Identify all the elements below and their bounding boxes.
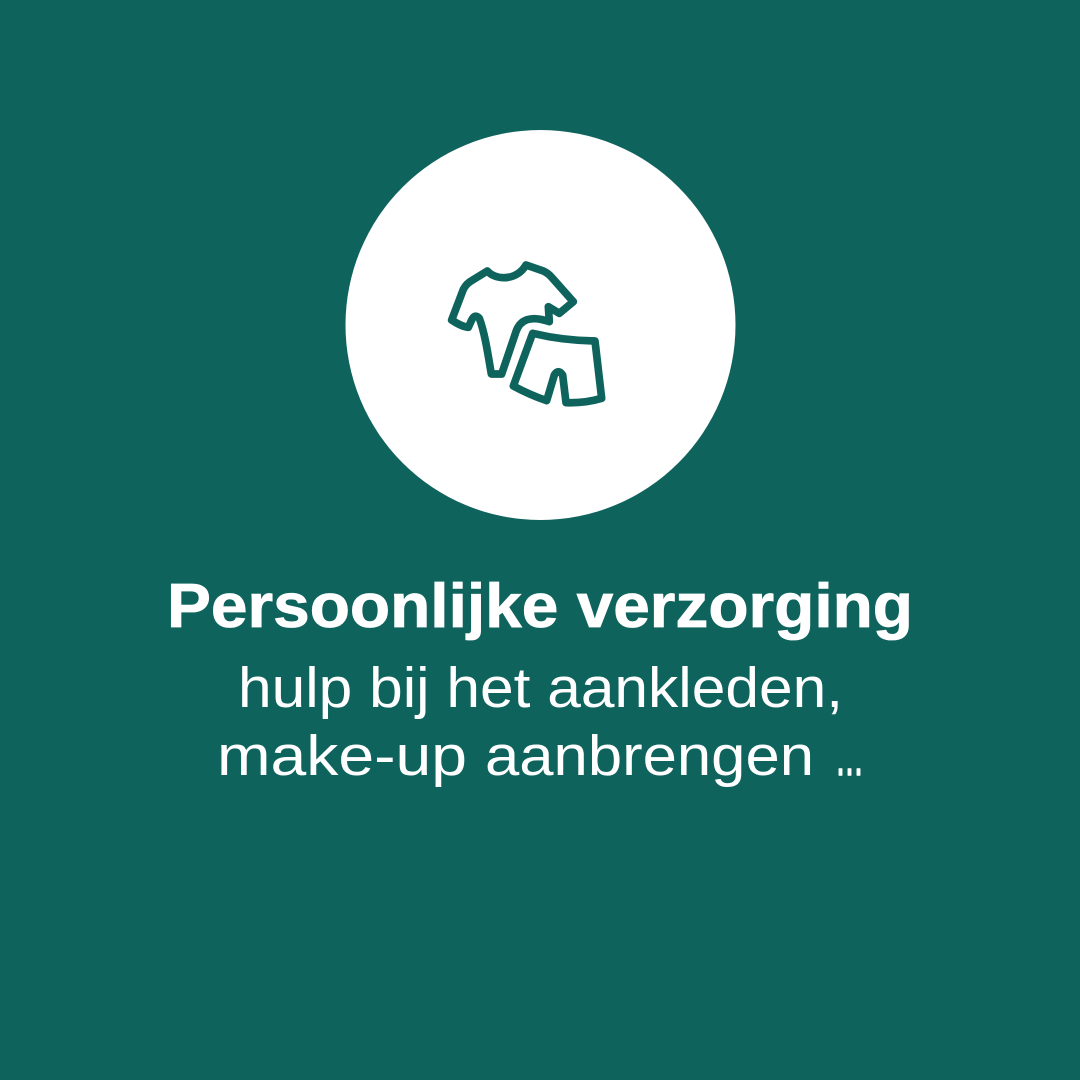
description line 2: make-up <box>217 724 467 788</box>
description text <box>217 656 863 788</box>
description line 2: ... <box>836 724 863 788</box>
icon: shirt and shorts <box>452 265 602 403</box>
icon: shirt <box>452 265 573 374</box>
description line 2 <box>217 724 863 788</box>
white circle <box>346 130 736 520</box>
icon: shorts <box>513 333 602 403</box>
description line 1: hulp bij het aankleden, <box>238 656 843 720</box>
description line 2: aanbrengen <box>485 724 814 788</box>
heading: Persoonlijke verzorging <box>167 572 913 641</box>
